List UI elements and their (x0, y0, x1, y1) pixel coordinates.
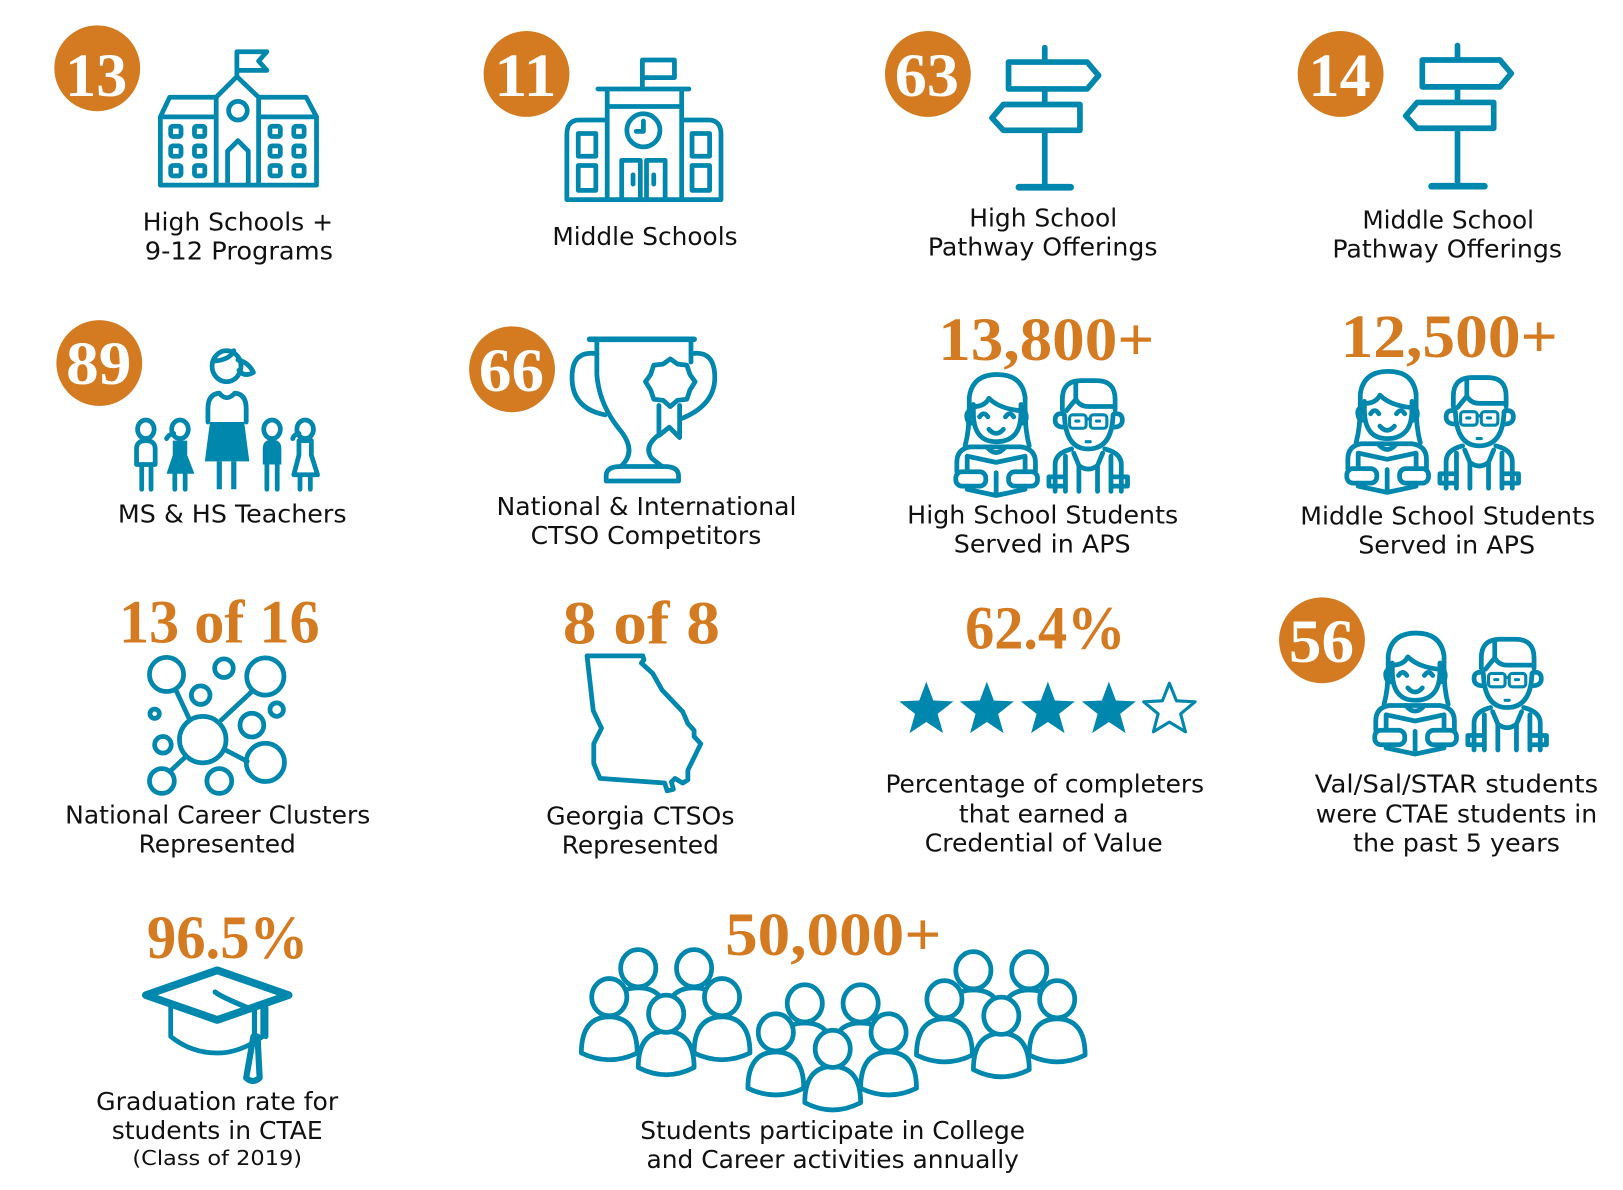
icon: two students (1347, 371, 1519, 492)
icon: two students (1375, 633, 1546, 754)
label: middle school pathways (1332, 206, 1562, 264)
icon: signpost (1406, 46, 1511, 186)
label: middle school students (1300, 501, 1595, 559)
label: middle schools: Middle Schools (552, 222, 738, 251)
label: college and career activities (640, 1116, 1025, 1174)
stat: career clusters (65, 589, 370, 858)
label: high schools: High Schools + (143, 208, 333, 237)
icon: star rating (899, 682, 1195, 733)
icon: teacher and students (137, 351, 318, 489)
label: high school pathways: Pathway Offerings (928, 233, 1158, 262)
figure: 12,500+: 12,500+ (1341, 304, 1558, 371)
label: credential of value (885, 769, 1204, 857)
label: high school students (907, 500, 1178, 558)
label: teachers: MS & HS Teachers (118, 499, 347, 528)
label: Georgia CTSOs (546, 801, 734, 859)
badge: 63 (885, 31, 971, 117)
badge: 56: 56 (1289, 609, 1354, 676)
label: CTSO competitors (497, 492, 797, 550)
figure: 13,800+: 13,800+ (938, 307, 1154, 374)
stat: high school pathways (885, 31, 1158, 262)
stat: CTSO competitors (469, 326, 797, 550)
badge: 11 (484, 31, 569, 117)
label: high schools (143, 208, 333, 266)
label: CTSO competitors: National & International (497, 492, 797, 521)
badge: 63: 63 (895, 43, 959, 110)
icon: two students (956, 374, 1128, 495)
stat: Georgia CTSOs (546, 590, 734, 859)
label: credential of value: Percentage of completers (885, 769, 1204, 798)
badge: 89: 89 (66, 331, 131, 398)
label: high school pathways (928, 204, 1158, 262)
icon: map of Georgia (587, 656, 701, 791)
label: Val/Sal/STAR students: Val/Sal/STAR students (1315, 769, 1598, 798)
label: Georgia CTSOs: Georgia CTSOs (546, 801, 734, 830)
stat: middle school pathways (1298, 31, 1562, 264)
badge: 11: 11 (494, 43, 557, 110)
badge: 66 (469, 326, 555, 412)
stat: graduation rate (96, 905, 339, 1170)
figure: 13 of 16: 13 of 16 (119, 589, 320, 656)
badge: 14 (1298, 31, 1384, 117)
icon: signpost (992, 48, 1099, 187)
label: career clusters: Represented (139, 829, 296, 858)
label: graduation rate: students in CTAE (112, 1116, 323, 1145)
badge: 13 (54, 25, 140, 111)
label: middle school pathways: Pathway Offerings (1332, 235, 1562, 264)
label: middle school students: Served in APS (1358, 530, 1535, 559)
badge: 14: 14 (1309, 43, 1371, 110)
stat: middle schools (484, 31, 738, 251)
figure: 96.5%: 96.5% (147, 905, 308, 972)
label: Georgia CTSOs: Represented (562, 830, 719, 859)
icon: high school building (160, 52, 317, 185)
label: high school pathways: High School (969, 204, 1117, 233)
label: CTSO competitors: CTSO Competitors (531, 521, 761, 550)
badge: 56 (1279, 597, 1365, 683)
badge: 89 (56, 320, 142, 406)
label: graduation rate (96, 1087, 339, 1170)
label: college and career activities: and Career activities annually (647, 1145, 1019, 1174)
icon: trophy (572, 339, 715, 481)
figure: 62.4%: 62.4% (965, 596, 1125, 663)
stat: high schools (54, 25, 333, 266)
icon: network of clusters (149, 657, 284, 793)
label: Val/Sal/STAR students (1315, 769, 1598, 857)
label: high school students: Served in APS (954, 529, 1131, 558)
label: high school students: High School Students (907, 500, 1178, 529)
stat: credential of value (885, 596, 1204, 857)
label: Val/Sal/STAR students: were CTAE students in (1316, 799, 1597, 828)
stat: high school students (907, 307, 1178, 558)
badge: 13: 13 (65, 43, 127, 110)
icon: crowd of students (581, 950, 1085, 1110)
label: career clusters (65, 800, 370, 858)
stat: teachers (56, 320, 347, 528)
figure: 50,000+: 50,000+ (725, 902, 941, 969)
icon: graduation cap (146, 970, 289, 1081)
label: Val/Sal/STAR students: the past 5 years (1353, 828, 1560, 857)
label: career clusters: National Career Clusters (65, 800, 370, 829)
stat: Val/Sal/STAR students (1279, 597, 1598, 857)
stat: college and career activities (581, 902, 1085, 1174)
label: graduation rate: Graduation rate for (96, 1087, 339, 1116)
label: high schools: 9-12 Programs (145, 237, 333, 266)
icon: middle school building (567, 60, 721, 200)
label: graduation rate: (Class of 2019) (132, 1146, 302, 1170)
label: middle school pathways: Middle School (1362, 206, 1534, 235)
figure: 8 of 8: 8 of 8 (563, 590, 720, 657)
label: middle school students: Middle School Students (1300, 501, 1595, 530)
badge: 66: 66 (479, 338, 544, 405)
stat: middle school students (1300, 304, 1595, 559)
label: credential of value: Credential of Value (925, 828, 1163, 857)
label: credential of value: that earned a (959, 799, 1129, 828)
label: college and career activities: Students participate in College (640, 1116, 1025, 1145)
